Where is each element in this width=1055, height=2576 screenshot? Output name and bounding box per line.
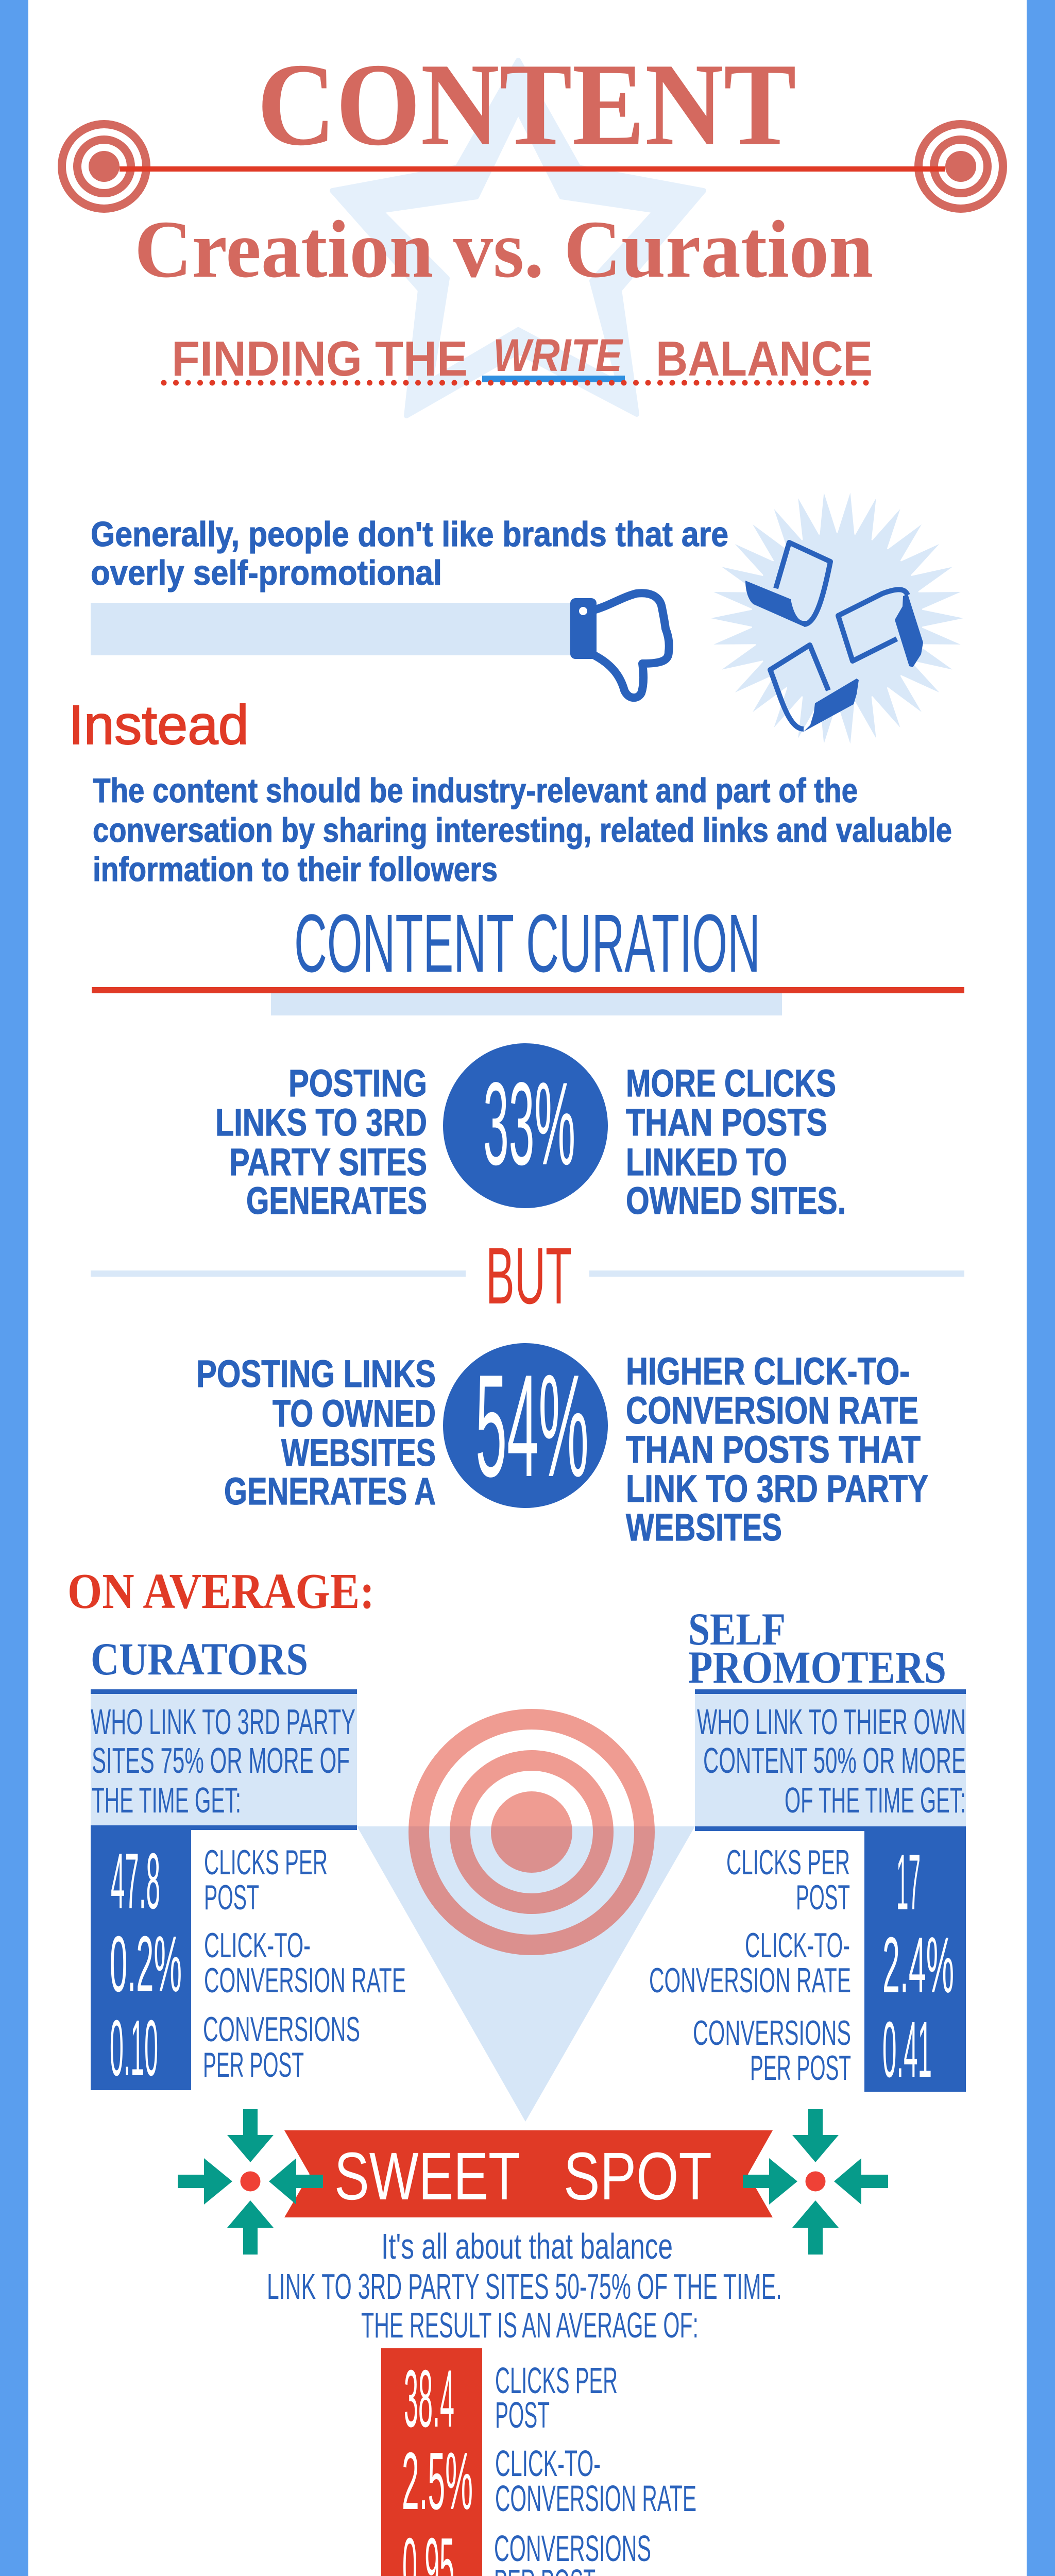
icon: right converging arrows [743, 2109, 888, 2255]
panel: self promoters: PER POST [750, 2048, 851, 2088]
panel: sweet spot results: CLICK-TO- [495, 2444, 601, 2484]
tagline: FINDING THE [172, 331, 468, 386]
panel: curators: WHO LINK TO 3RD PARTY [91, 1702, 355, 1742]
tagline: WRITE [493, 329, 623, 381]
stat: 54 percent: POSTING LINKS [196, 1352, 436, 1395]
panel: curators: 47.8 [111, 1837, 160, 1925]
stat: 33 percent: OWNED SITES. [626, 1179, 846, 1222]
panel: sweet spot results: CONVERSION RATE [495, 2479, 696, 2519]
stat: 33 percent: PARTY SITES [229, 1141, 427, 1183]
stat: 54 percent: GENERATES A [224, 1470, 436, 1513]
panel: sweet spot results: 38.4 [404, 2353, 454, 2444]
icon: burst with pages [711, 492, 963, 744]
panel: self promoters: 17 [896, 1838, 921, 1926]
stat: 33 percent: THAN POSTS [626, 1101, 827, 1144]
stat: 54 percent: WEBSITES [281, 1431, 436, 1474]
divider: BUT: BUT [486, 1231, 572, 1321]
title: CONTENT: CONTENT [257, 39, 796, 170]
title rule [120, 166, 945, 172]
right target icon [918, 124, 1003, 209]
subtitle: creation vs curation: Creation vs. Curation [134, 204, 873, 295]
panel: curators [91, 1634, 406, 2092]
intro text: overly self-promotional [91, 553, 442, 592]
banner: sweet spot: SPOT [564, 2138, 712, 2214]
star background [332, 60, 704, 416]
paragraph: curation explanation: The content should be industry-relevant and part of the [93, 771, 858, 809]
banner: sweet spot: SWEET [334, 2138, 520, 2214]
banner: sweet spot [284, 2130, 773, 2217]
heading rule and band [92, 987, 964, 1015]
stat: 54 percent: THAN POSTS THAT [626, 1428, 921, 1471]
light band [91, 603, 580, 655]
stat: 54 percent: LINK TO 3RD PARTY [626, 1467, 928, 1510]
stat: 33 percent [215, 1043, 846, 1222]
panel: curators: 0.2% [110, 1920, 182, 2008]
stat: 54 percent: 54% [475, 1344, 589, 1507]
heading: Instead: Instead [69, 693, 249, 756]
panel: curators: CURATORS [91, 1634, 308, 1685]
big target [419, 1719, 644, 1945]
panel: sweet spot results: CLICKS PER [495, 2361, 618, 2401]
intro text [91, 515, 728, 592]
stat: 33 percent: GENERATES [246, 1179, 427, 1222]
panel: self promoters: CLICK-TO- [745, 1926, 850, 1965]
icon: thumbs down [570, 593, 669, 698]
text: balance explanation: THE RESULT IS AN AVERAGE OF: [361, 2305, 699, 2345]
panel: curators: PER POST [203, 2045, 304, 2084]
panel: self promoters: POST [796, 1878, 850, 1917]
panel: self promoters [649, 1604, 966, 2094]
panel: sweet spot results: POST [495, 2395, 550, 2436]
stat: 33 percent: LINKED TO [626, 1141, 787, 1183]
paragraph: curation explanation: information to their followers [93, 850, 498, 888]
stat: 54 percent [196, 1343, 928, 1549]
paragraph: curation explanation [93, 771, 952, 888]
stat: 54 percent: TO OWNED [273, 1392, 436, 1435]
panel: self promoters: 0.41 [882, 2005, 932, 2094]
panel: self promoters: CLICKS PER [726, 1843, 850, 1882]
stat: 33 percent: POSTING [288, 1062, 427, 1105]
stat: 33 percent: 33% [483, 1058, 575, 1190]
stat: 33 percent: MORE CLICKS [626, 1062, 836, 1105]
tagline [164, 329, 878, 386]
heading: on average: ON AVERAGE: [67, 1564, 375, 1619]
panel: curators: THE TIME GET: [92, 1780, 241, 1820]
panel: sweet spot results: 2.5% [402, 2436, 473, 2527]
panel: self promoters: SELF [688, 1604, 786, 1655]
panel: curators: 0.10 [110, 2004, 158, 2092]
panel: sweet spot results [381, 2348, 696, 2576]
intro text: Generally, people don't like brands that are [91, 515, 728, 554]
panel: sweet spot results: CONVERSIONS [494, 2529, 651, 2569]
panel: self promoters: CONVERSIONS [693, 2013, 851, 2053]
panel: self promoters: PROMOTERS [688, 1642, 946, 1693]
stat: 33 percent: LINKS TO 3RD [215, 1101, 427, 1144]
funnel triangle [357, 1826, 695, 2122]
panel: curators: CLICK-TO- [204, 1926, 311, 1965]
stat: 54 percent: CONVERSION RATE [626, 1389, 918, 1432]
icon: left converging arrows [178, 2109, 323, 2255]
left target icon [62, 124, 146, 209]
panel: curators: CONVERSION RATE [204, 1961, 406, 2000]
panel: curators: SITES 75% OR MORE OF [92, 1740, 350, 1781]
panel: self promoters: CONVERSION RATE [649, 1961, 851, 2000]
panel: curators: POST [204, 1878, 259, 1917]
panel: curators: CLICKS PER [204, 1843, 328, 1882]
tagline: BALANCE [656, 331, 873, 386]
text: balance explanation: It's all about that balance [381, 2226, 673, 2266]
text: balance explanation [267, 2226, 782, 2345]
stat: 54 percent: WEBSITES [626, 1506, 782, 1549]
divider: BUT [91, 1231, 964, 1321]
panel: curators: CONVERSIONS [203, 2010, 360, 2049]
stat: 54 percent: HIGHER CLICK-TO- [626, 1350, 910, 1393]
